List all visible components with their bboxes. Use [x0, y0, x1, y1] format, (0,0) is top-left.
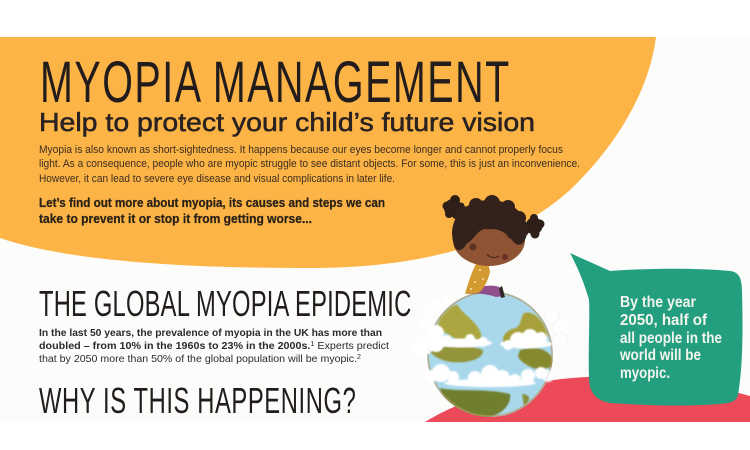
- bubble text: 2050, half of: [620, 312, 708, 329]
- faint cloud wisps: [542, 309, 571, 382]
- globe illustration: [427, 292, 554, 417]
- bubble text: By the year: [620, 294, 696, 311]
- cheeks and smile: [470, 244, 476, 250]
- epidemic paragraph: [39, 327, 389, 365]
- title: MYOPIA MANAGEMENT: [40, 49, 509, 115]
- bubble text: all people in the: [620, 330, 722, 347]
- subtitle: Help to protect your child’s future vision: [39, 107, 535, 137]
- epidemic paragraph: doubled – from 10% in the 1960s to 23% in the 2000s.: [39, 340, 311, 352]
- red hill: [425, 377, 750, 422]
- call to action text: [39, 196, 385, 226]
- yellow dress: [465, 262, 490, 294]
- call to action text: Let’s find out more about myopia, its causes and steps we can: [39, 196, 385, 210]
- intro text: However, it can lead to severe eye disease and visual complications in later life.: [39, 173, 395, 185]
- heading: why is this happening: WHY IS THIS HAPPENING?: [39, 381, 356, 421]
- epidemic paragraph: that by 2050 more than 50% of the global population will be myopic.: [39, 353, 354, 365]
- bubble text: world will be: [619, 347, 701, 364]
- bubble shape: [570, 253, 743, 406]
- face: [453, 214, 525, 266]
- clouds: [410, 295, 552, 387]
- epidemic paragraph: 1: [310, 341, 315, 348]
- epidemic paragraph: In the last 50 years, the prevalence of myopia in the UK has more than: [39, 327, 382, 339]
- speech bubble: [570, 253, 743, 406]
- hair buns: [442, 195, 544, 238]
- hair: [452, 195, 529, 250]
- orange header shape: [0, 37, 656, 268]
- legs and skirt: [468, 286, 503, 297]
- heading: global myopia epidemic: THE GLOBAL MYOPIA EPIDEMIC: [39, 284, 411, 324]
- epidemic paragraph: Experts predict: [314, 340, 389, 352]
- girl illustration: [442, 195, 544, 298]
- intro text: [39, 144, 580, 185]
- call to action text: take to prevent it or stop it from getting worse...: [39, 212, 312, 226]
- intro text: light. As a consequence, people who are myopic struggle to see distant objects. For some, this is just an inconvenience.: [39, 158, 580, 170]
- bubble text: [619, 294, 722, 382]
- intro text: Myopia is also known as short-sightedness. It happens because our eyes become longer and cannot properly focus: [39, 144, 563, 156]
- epidemic paragraph: 2: [357, 354, 361, 361]
- bubble text: myopic.: [620, 365, 670, 382]
